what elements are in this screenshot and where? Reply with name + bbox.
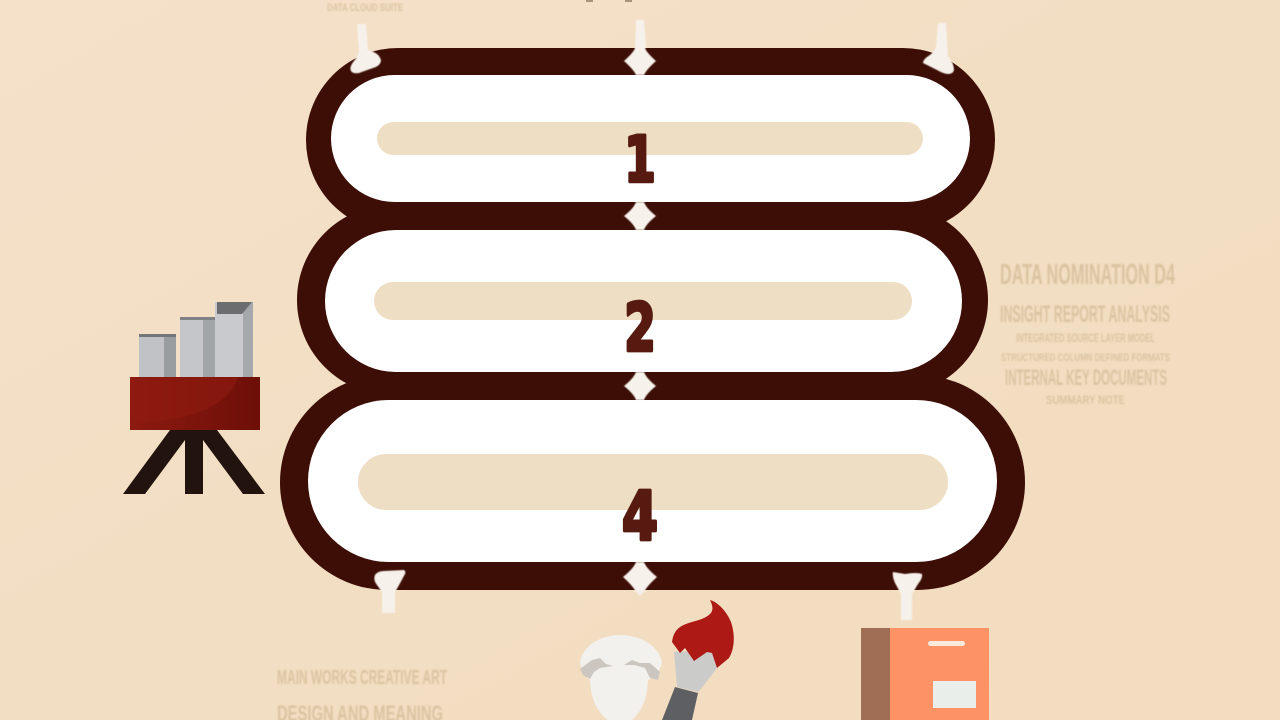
layer 2 [297, 205, 988, 395]
text block: bottom left [277, 667, 447, 720]
layer 1: 1 [624, 123, 656, 196]
icon: paintbrush [662, 600, 734, 720]
legs [123, 430, 265, 494]
panel: stacked layers [280, 48, 1025, 590]
text block: right [1000, 259, 1175, 407]
layer 1 [306, 48, 995, 232]
text block: right: INTEGRATED SOURCE LAYER MODEL [1016, 331, 1155, 345]
flame [672, 600, 734, 668]
ferrule [662, 687, 698, 720]
layer 2: 2 [624, 291, 656, 367]
connectors [350, 20, 954, 620]
stand [130, 377, 260, 430]
icon: head [580, 635, 662, 720]
icon: box [861, 628, 989, 720]
top caption: DATA CLOUD SUITE [327, 2, 403, 14]
text block: bottom left: MAIN WORKS CREATIVE ART [277, 667, 447, 689]
bars [139, 302, 253, 377]
layer 3: 4 [622, 479, 658, 556]
handle [674, 650, 717, 692]
layer 3 [280, 375, 1025, 590]
text block: right: SUMMARY NOTE [1046, 393, 1125, 407]
icon: bar chart on stand [123, 302, 265, 494]
text block: right: STRUCTURED COLUMN DEFINED FORMATS [1001, 352, 1170, 364]
